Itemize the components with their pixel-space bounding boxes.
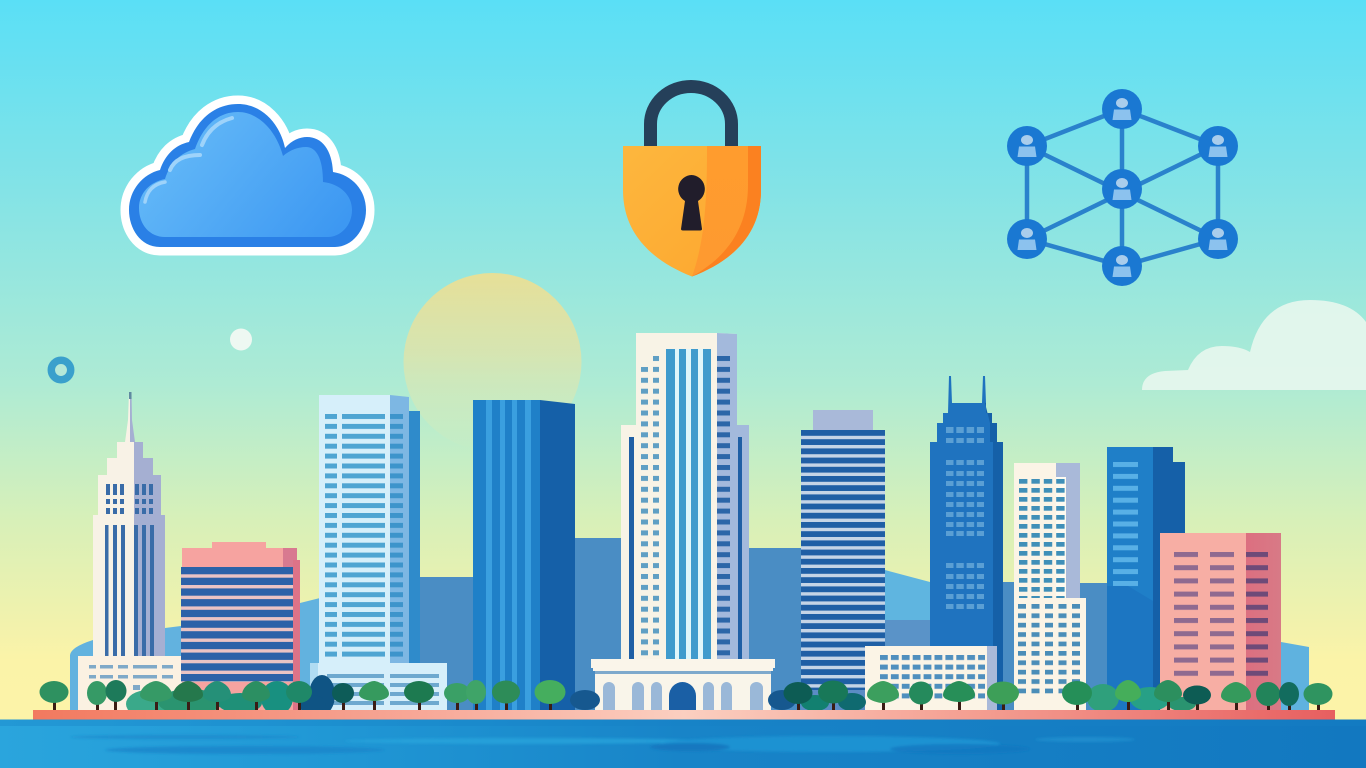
icon: user network	[1007, 89, 1238, 286]
row of trees	[40, 675, 1332, 718]
water	[0, 720, 1366, 768]
shrubs	[126, 675, 1196, 718]
building: blue glass tower	[473, 400, 575, 710]
sun	[404, 273, 582, 451]
tower podium	[78, 656, 182, 710]
background hills and blocks	[70, 538, 1309, 710]
building: white art-deco spire tower	[78, 392, 182, 710]
waterfront promenade	[33, 710, 1335, 720]
building: salmon block	[1160, 533, 1281, 710]
keyhole	[678, 175, 705, 230]
icon: cloud	[129, 104, 366, 247]
small pale circle	[230, 328, 252, 350]
classical base	[591, 659, 775, 710]
building: cream window tower	[1014, 463, 1086, 710]
background cloud	[1142, 300, 1366, 390]
building: pink striped block	[181, 542, 300, 710]
icon: padlock	[623, 87, 761, 277]
building: blue notched tower	[1107, 447, 1185, 710]
building: stepped blue tower with antennas	[930, 376, 1003, 710]
building: navy striped tower	[801, 410, 885, 710]
building: low cream block	[865, 646, 997, 710]
shackle	[650, 87, 732, 147]
tower podium	[310, 663, 447, 710]
small ring	[51, 360, 71, 380]
building: light blue tower	[310, 395, 447, 710]
lock body	[623, 146, 761, 276]
building: central white tower	[591, 333, 775, 710]
